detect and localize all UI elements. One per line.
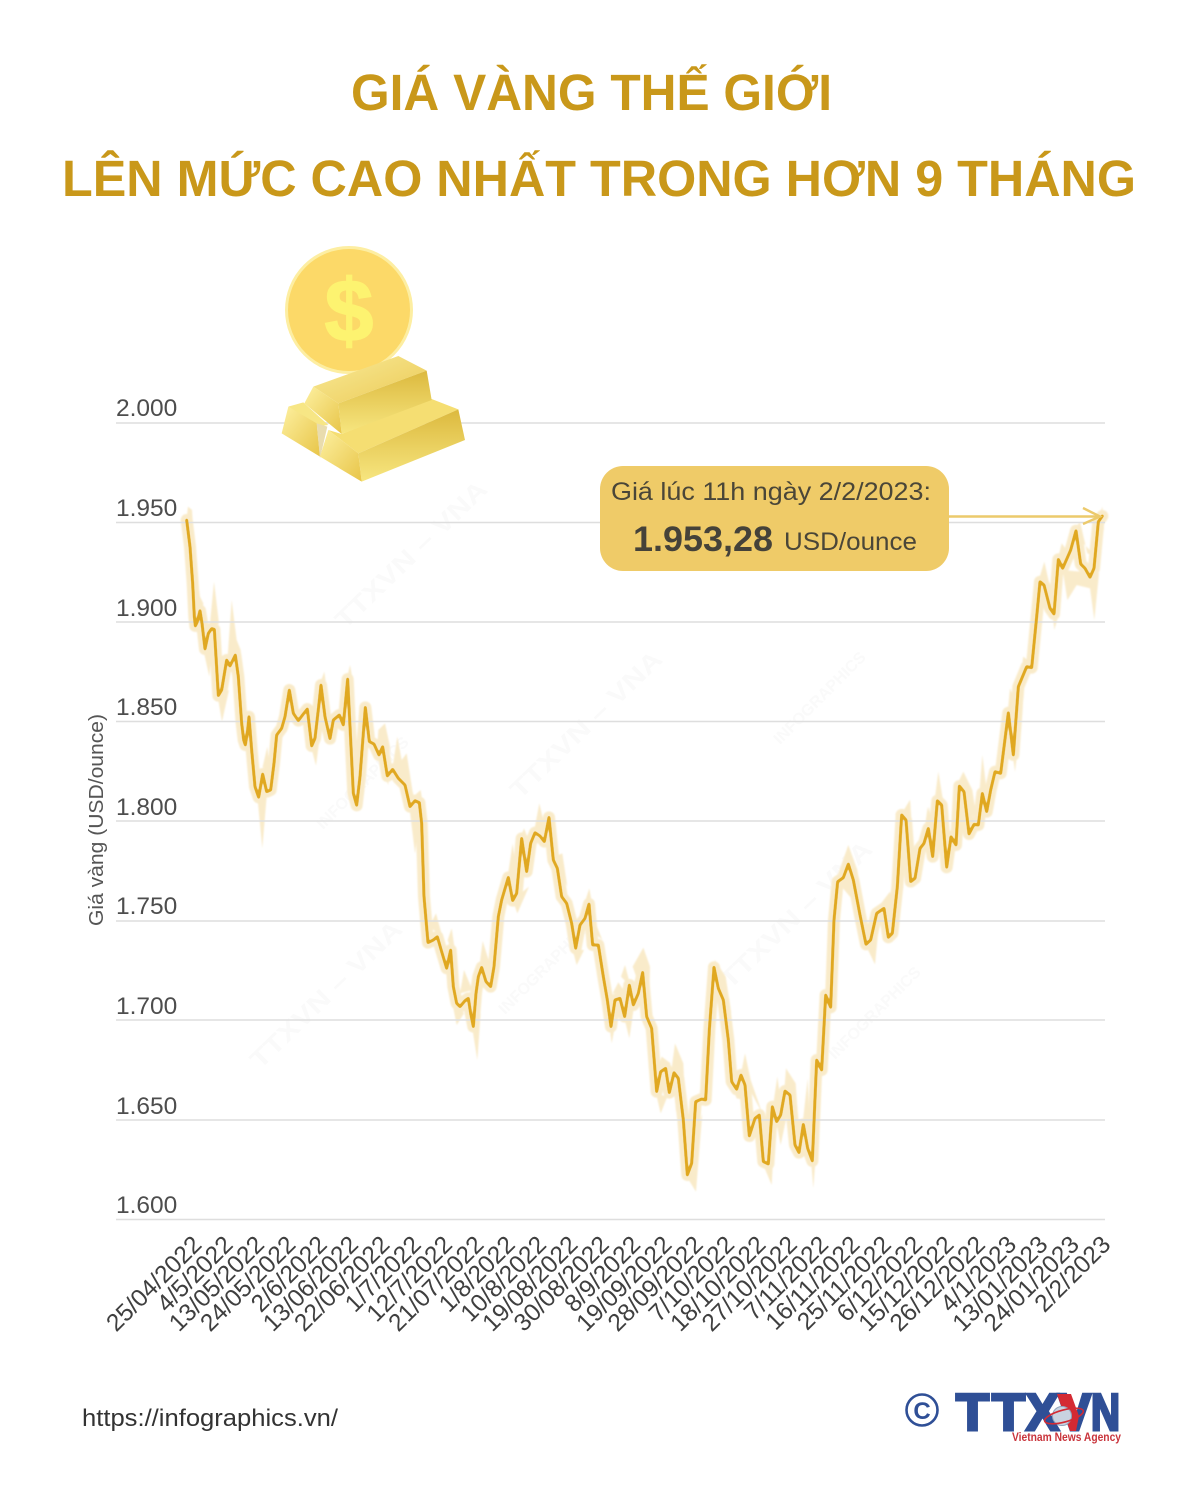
callout: latest price: 1.953,28 (633, 520, 773, 559)
x axis date labels: 1/8/2022 (434, 1231, 521, 1318)
copyright icon (906, 1394, 938, 1426)
y axis title: Giá vàng (USD/ounce) (85, 714, 108, 926)
gold price line (187, 516, 1102, 1175)
watermarks: INFOGRAPHICS (496, 919, 595, 1018)
x axis date labels: 25/04/2022 (101, 1231, 207, 1337)
logo: TTXVN: N (1091, 1384, 1120, 1442)
source url: https://infographics.vn/ (82, 1405, 338, 1432)
watermarks: INFOGRAPHICS (314, 734, 413, 833)
title: LÊN MỨC CAO NHẤT TRONG HƠN 9 THÁNG (62, 149, 1136, 207)
price range band (186, 507, 1104, 1192)
x axis date labels: 7/10/2022 (644, 1231, 740, 1327)
logo: TTXVN: V (1058, 1384, 1091, 1442)
title: GIÁ VÀNG THẾ GIỚI (351, 63, 832, 121)
y axis labels: 1.950 (116, 495, 177, 522)
watermarks: INFOGRAPHICS (826, 964, 925, 1063)
watermarks: INFOGRAPHICS (771, 649, 870, 748)
x axis date labels: 26/12/2022 (885, 1231, 991, 1337)
x axis date labels: 13/01/2023 (948, 1231, 1053, 1337)
x axis date labels: 2/6/2022 (246, 1231, 333, 1318)
watermarks: TTXVN – VNA (505, 645, 668, 804)
y axis labels: 1.750 (116, 893, 177, 920)
arrow to last price (948, 508, 1100, 524)
x axis date labels: 2/2/2023 (1030, 1231, 1116, 1318)
callout: latest price: Giá lúc 11h ngày 2/2/2023: (611, 478, 931, 506)
logo: TTXVN: T (992, 1384, 1025, 1442)
x axis date labels: 19/09/2022 (572, 1231, 677, 1337)
x axis date labels: 21/07/2022 (384, 1231, 489, 1337)
logo: TTXVN: X (1026, 1384, 1059, 1442)
logo: TTXVN: Vietnam News Agency (1012, 1432, 1122, 1444)
x axis date labels: 10/8/2022 (456, 1231, 552, 1327)
x axis date labels: 7/11/2022 (739, 1231, 834, 1326)
x axis date labels: 28/09/2022 (603, 1231, 709, 1337)
x axis date labels: 18/10/2022 (666, 1231, 771, 1337)
icon: coin: $ (325, 261, 373, 360)
x axis date labels: 27/10/2022 (697, 1231, 803, 1337)
logo: TTXVN: T (956, 1384, 989, 1442)
y axis labels: 1.700 (116, 993, 177, 1020)
y axis labels: 1.650 (116, 1093, 177, 1120)
x axis date labels: 30/08/2022 (509, 1231, 615, 1337)
watermarks: TTXVN – VNA (245, 915, 408, 1074)
y axis labels: 1.600 (116, 1192, 177, 1219)
x axis date labels: 19/08/2022 (478, 1231, 583, 1337)
x axis date labels: 4/1/2023 (936, 1231, 1022, 1318)
x axis date labels: 6/12/2022 (832, 1231, 928, 1327)
logo: TTXVN (956, 1384, 1122, 1444)
y axis labels: 1.800 (116, 794, 177, 821)
x axis date labels: 12/7/2022 (362, 1231, 458, 1327)
callout: latest price (600, 466, 949, 571)
x axis date labels: 8/9/2022 (560, 1231, 646, 1318)
gridlines (116, 423, 1105, 1220)
x axis date labels: 1/7/2022 (340, 1231, 427, 1318)
title (62, 63, 1136, 207)
copyright icon: C (913, 1398, 931, 1425)
watermarks: TTXVN – VNA (715, 835, 878, 994)
x axis date labels: 16/11/2022 (761, 1231, 865, 1336)
icon: gold coin and bars (282, 248, 465, 482)
x axis date labels: 15/12/2022 (854, 1231, 959, 1337)
y axis labels (116, 395, 177, 1219)
x axis date labels: 22/06/2022 (289, 1231, 395, 1337)
x axis date labels: 13/05/2022 (164, 1231, 270, 1337)
x axis date labels: 25/11/2022 (792, 1231, 897, 1336)
x axis date labels: 24/05/2022 (195, 1231, 301, 1337)
x axis date labels (101, 1231, 1116, 1337)
watermarks (245, 475, 925, 1074)
x axis date labels: 24/01/2023 (979, 1231, 1085, 1337)
watermarks: TTXVN – VNA (330, 475, 493, 634)
x axis date labels: 13/06/2022 (258, 1231, 364, 1337)
y axis labels: 1.850 (116, 694, 177, 721)
y axis labels: 2.000 (116, 395, 177, 422)
icon: coin (286, 248, 412, 372)
y axis labels: 1.900 (116, 595, 177, 622)
x axis date labels: 4/5/2022 (152, 1231, 239, 1318)
callout: latest price: USD/ounce (784, 528, 917, 556)
icon: gold bars (282, 356, 465, 482)
